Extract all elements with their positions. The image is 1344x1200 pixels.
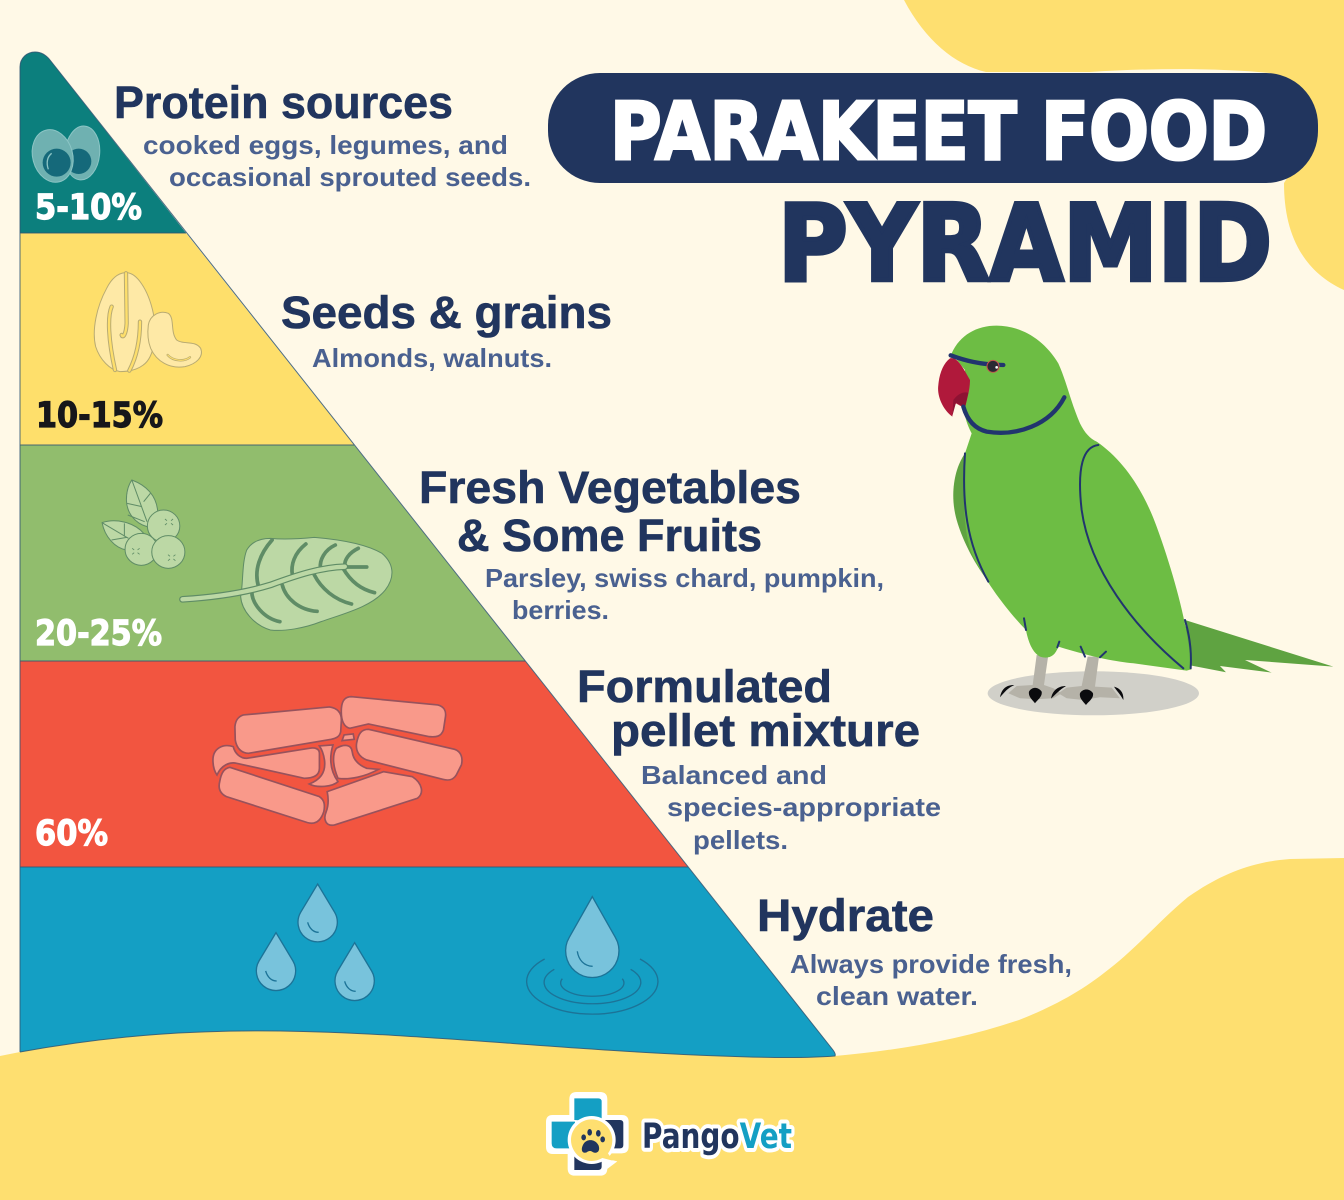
- tier: seeds and grains: [20, 233, 354, 445]
- background blob: top right: [904, 0, 1344, 290]
- text block: formulated pellets: pellets.: [693, 825, 788, 855]
- food pyramid: [20, 52, 835, 1058]
- title: pyramid: PYRAMID: [778, 183, 1272, 305]
- tier: protein sources: [20, 52, 186, 233]
- icon: nuts: [94, 273, 201, 372]
- text block: seeds and grains: Seeds & grains: [281, 287, 612, 338]
- percent label: 10-15%: 10-15%: [36, 396, 163, 436]
- text block: hydrate: Hydrate: [757, 890, 934, 941]
- logo icon: cross with paw bubble: [546, 1092, 629, 1176]
- tier: formulated pellets: [20, 661, 688, 867]
- percent label: 5-10%: 5-10%: [35, 188, 142, 228]
- text block: protein sources: [114, 77, 531, 192]
- title: parakeet food pill: PARAKEET FOOD: [610, 86, 1267, 178]
- text block: formulated pellets: Balanced and: [641, 760, 827, 790]
- tier: hydrate: [20, 867, 835, 1058]
- text block: seeds and grains: Almonds, walnuts.: [312, 343, 552, 373]
- icon: pellets: [213, 697, 462, 825]
- icon: chard leaf: [183, 537, 392, 630]
- feet and legs: [1008, 655, 1120, 700]
- icon: water drop with ripples: [527, 897, 658, 1014]
- text block: formulated pellets: Formulated: [577, 661, 832, 712]
- icon: water drops: [256, 884, 374, 1001]
- logo: PangoVet: [546, 1092, 792, 1176]
- percent label: 60%: 60%: [35, 814, 108, 854]
- text block: formulated pellets: pellet mixture: [611, 705, 920, 756]
- tail: [1185, 620, 1333, 673]
- text block: hydrate: Always provide fresh,: [790, 949, 1072, 979]
- icon: berries and leaves: [102, 480, 185, 568]
- illustration: parakeet: [938, 326, 1333, 715]
- body: [952, 326, 1192, 671]
- collar and face stripes: [951, 355, 1191, 668]
- text block: fresh vegetables: & Some Fruits: [457, 510, 762, 561]
- text block: fresh vegetables: [419, 462, 884, 625]
- icon: eggs: [26, 125, 102, 187]
- text block: seeds and grains: [281, 287, 612, 373]
- tier: vegetables and fruits: [20, 445, 525, 661]
- text block: formulated pellets: [577, 661, 941, 855]
- text block: protein sources: Protein sources: [114, 77, 453, 128]
- text block: hydrate: clean water.: [816, 981, 978, 1011]
- text block: formulated pellets: species-appropriate: [667, 792, 941, 822]
- text block: fresh vegetables: berries.: [512, 595, 609, 625]
- far wing: [953, 453, 988, 582]
- text block: protein sources: cooked eggs, legumes, and: [143, 130, 508, 160]
- text block: fresh vegetables: Parsley, swiss chard, pumpkin,: [485, 563, 884, 593]
- text block: hydrate: [757, 890, 1072, 1011]
- eye: [987, 360, 999, 372]
- percent label: 20-25%: 20-25%: [35, 614, 162, 654]
- pyramid outline: [20, 52, 835, 1058]
- beak: [938, 358, 970, 417]
- text block: protein sources: occasional sprouted seeds.: [169, 162, 531, 192]
- background blob: bottom wave: [0, 858, 1344, 1200]
- logo wordmark: PangoVet: [642, 1117, 792, 1157]
- text block: fresh vegetables: Fresh Vegetables: [419, 462, 801, 513]
- shadow: [988, 671, 1199, 715]
- claws: [1000, 685, 1123, 705]
